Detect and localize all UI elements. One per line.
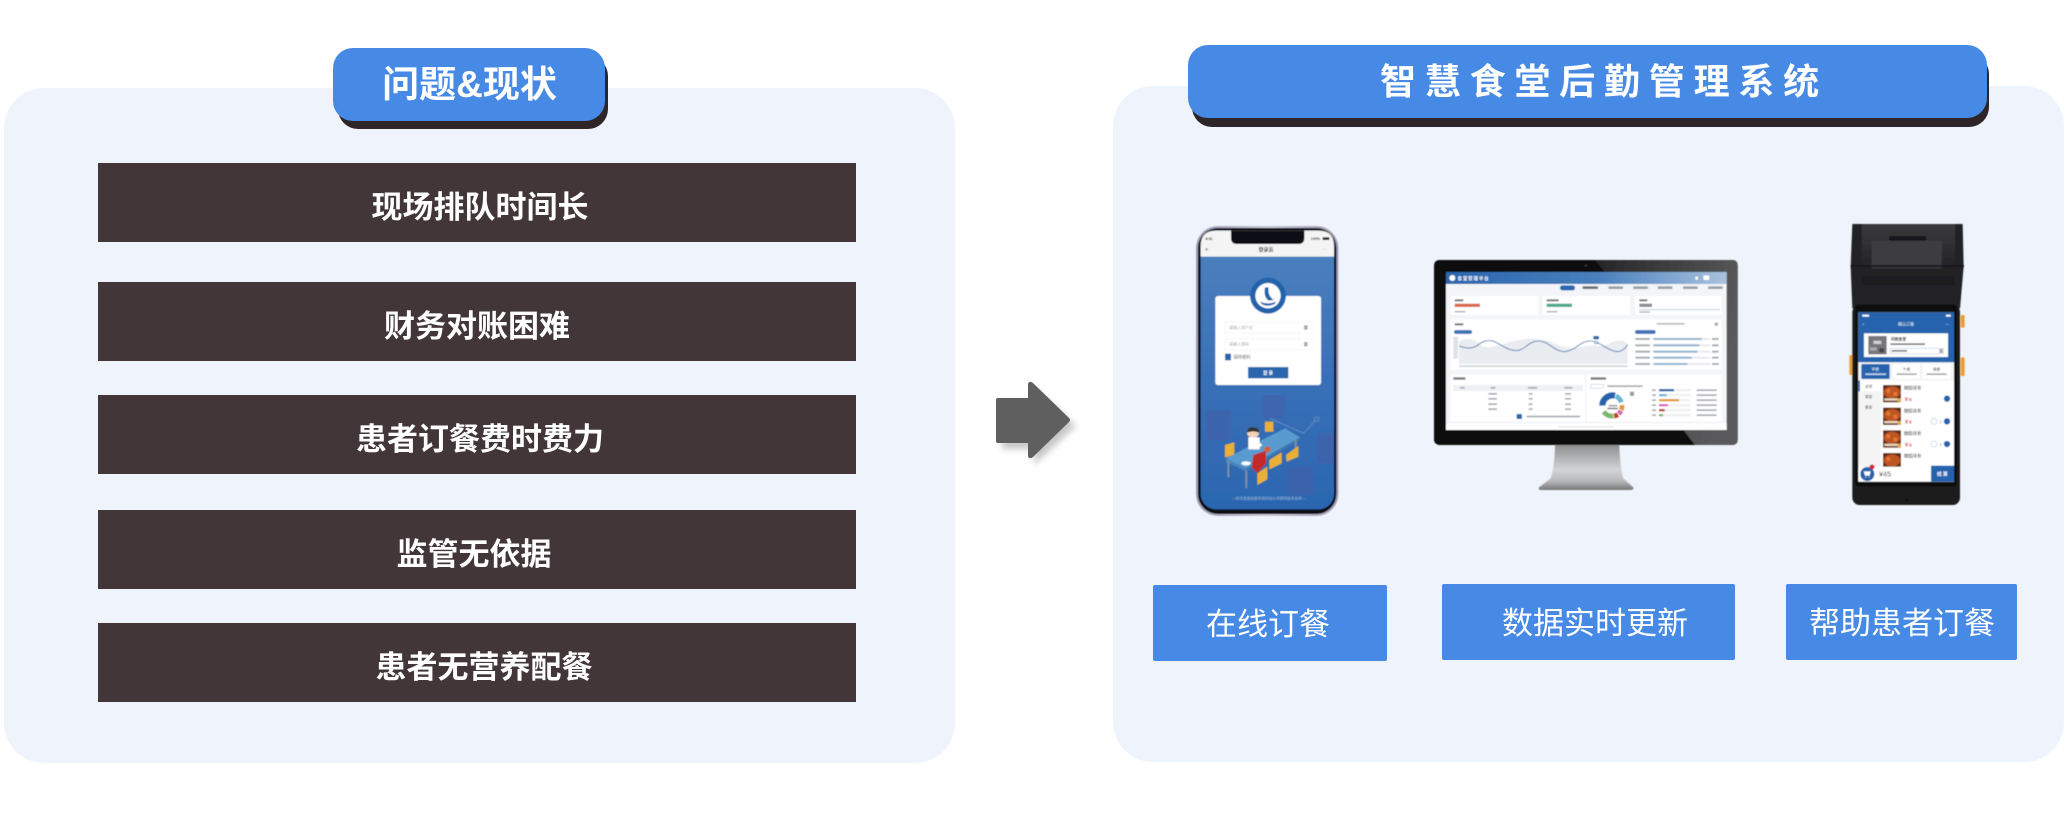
device: handheld ordering terminal	[1849, 224, 1965, 505]
food rows	[1883, 385, 1901, 467]
horizontal bars	[1653, 338, 1710, 365]
feature button: real-time data: 数据实时更新	[1502, 606, 1688, 641]
device: handheld ordering terminal: ···	[1945, 321, 1949, 326]
screen	[1858, 312, 1954, 482]
device: phone login screen: 9:41	[1205, 237, 1213, 241]
device: phone login screen: ×	[1205, 248, 1209, 254]
device: handheld ordering terminal: ¥45	[1879, 470, 1891, 479]
heading: problems and status	[333, 48, 608, 129]
qr image	[1868, 336, 1887, 354]
device: handheld ordering terminal: 全部	[1865, 383, 1873, 388]
problem bar: nutrition: 患者无营养配餐	[376, 650, 592, 685]
feature button: real-time data	[1442, 584, 1735, 660]
device: handheld ordering terminal: 书院食堂	[1890, 335, 1906, 341]
device: phone login screen: ···	[1322, 247, 1327, 253]
device: phone login screen: 请输入用户名	[1229, 324, 1253, 330]
device: desktop monitor dashboard: 食堂管理平台	[1458, 275, 1490, 282]
canteen illustration	[1265, 422, 1273, 432]
heading shadow	[1192, 54, 1989, 127]
chart panel	[1451, 319, 1722, 370]
device: handheld ordering terminal: ￥5	[1904, 397, 1912, 403]
table panel	[1451, 374, 1585, 422]
device: phone login screen: 登 录	[1263, 369, 1274, 376]
device: handheld ordering terminal: 糖醋排骨	[1904, 430, 1921, 437]
device: phone login screen: 100%	[1311, 237, 1321, 241]
heading: smart canteen system	[1188, 45, 1989, 127]
device: handheld ordering terminal: 1	[1940, 442, 1943, 447]
meal tabs	[1858, 362, 1954, 381]
device: phone login screen: —杭次连锁运营系统科技公司提供技术支持—	[1232, 496, 1306, 501]
line chart	[1459, 339, 1628, 364]
feature button: help patients order: 帮助患者订餐	[1809, 606, 1995, 641]
device: handheld ordering terminal: 糖醋排骨	[1904, 453, 1921, 460]
device: handheld ordering terminal: 素菜	[1865, 404, 1873, 409]
device: phone login screen: 请输入密码	[1229, 341, 1249, 347]
side buttons	[1849, 355, 1853, 375]
stand	[1539, 445, 1633, 490]
checkout bar	[1858, 467, 1954, 482]
problem bar: nutrition	[98, 623, 856, 702]
nav	[1560, 285, 1575, 290]
heading pill	[333, 48, 605, 121]
panel: smart canteen system	[1113, 86, 2064, 762]
device: handheld ordering terminal: 确认订餐	[1898, 320, 1914, 326]
problem bar: patient ordering	[98, 395, 856, 474]
heading pill	[1188, 45, 1987, 118]
arrow	[996, 382, 1076, 465]
problem bar: long queues	[98, 163, 856, 242]
feature button: online ordering: 在线订餐	[1206, 607, 1330, 642]
device: handheld ordering terminal: ￥5	[1904, 442, 1912, 448]
sidebar	[1858, 381, 1881, 467]
problem bar: long queues: 现场排队时间长	[372, 190, 588, 225]
device: phone login screen: 保持密码	[1233, 354, 1251, 361]
faint background blocks	[1206, 395, 1334, 495]
device: handheld ordering terminal: 糖醋排骨	[1904, 407, 1921, 414]
device: handheld ordering terminal: ￥5	[1904, 420, 1912, 426]
device: phone login screen	[1196, 226, 1338, 516]
heading shadow	[338, 56, 608, 129]
donut panel	[1587, 374, 1722, 422]
heading pill: 问题&现状	[382, 64, 557, 105]
device: handheld ordering terminal: ‹	[1863, 321, 1865, 326]
problem bar: reconciliation: 财务对账困难	[384, 309, 570, 344]
stat cards	[1451, 296, 1538, 315]
problem bar: reconciliation	[98, 282, 856, 361]
device: desktop monitor dashboard	[1434, 260, 1738, 490]
heading pill: 智慧食堂后勤管理系统	[1380, 61, 1828, 102]
device: handheld ordering terminal: 荤菜	[1865, 394, 1873, 399]
login card	[1215, 296, 1321, 385]
device: handheld ordering terminal: 结 算	[1937, 471, 1948, 478]
device: handheld ordering terminal: 晚餐	[1933, 367, 1941, 372]
device: handheld ordering terminal: 糖醋排骨	[1904, 385, 1921, 392]
feature button: online ordering	[1153, 585, 1387, 661]
problem bar: patient ordering: 患者订餐费时费力	[356, 422, 604, 457]
feature button: help patients order	[1786, 584, 2017, 660]
problem bar: supervision	[98, 510, 856, 589]
device: handheld ordering terminal: 午餐	[1903, 367, 1911, 372]
problem bar: supervision: 监管无依据	[396, 537, 552, 572]
device: handheld ordering terminal: 1	[1940, 419, 1943, 424]
device: phone login screen: 登录页	[1259, 246, 1273, 253]
device: handheld ordering terminal: 早餐	[1872, 367, 1879, 372]
printer top	[1851, 224, 1964, 308]
panel: problems and status	[4, 88, 955, 763]
